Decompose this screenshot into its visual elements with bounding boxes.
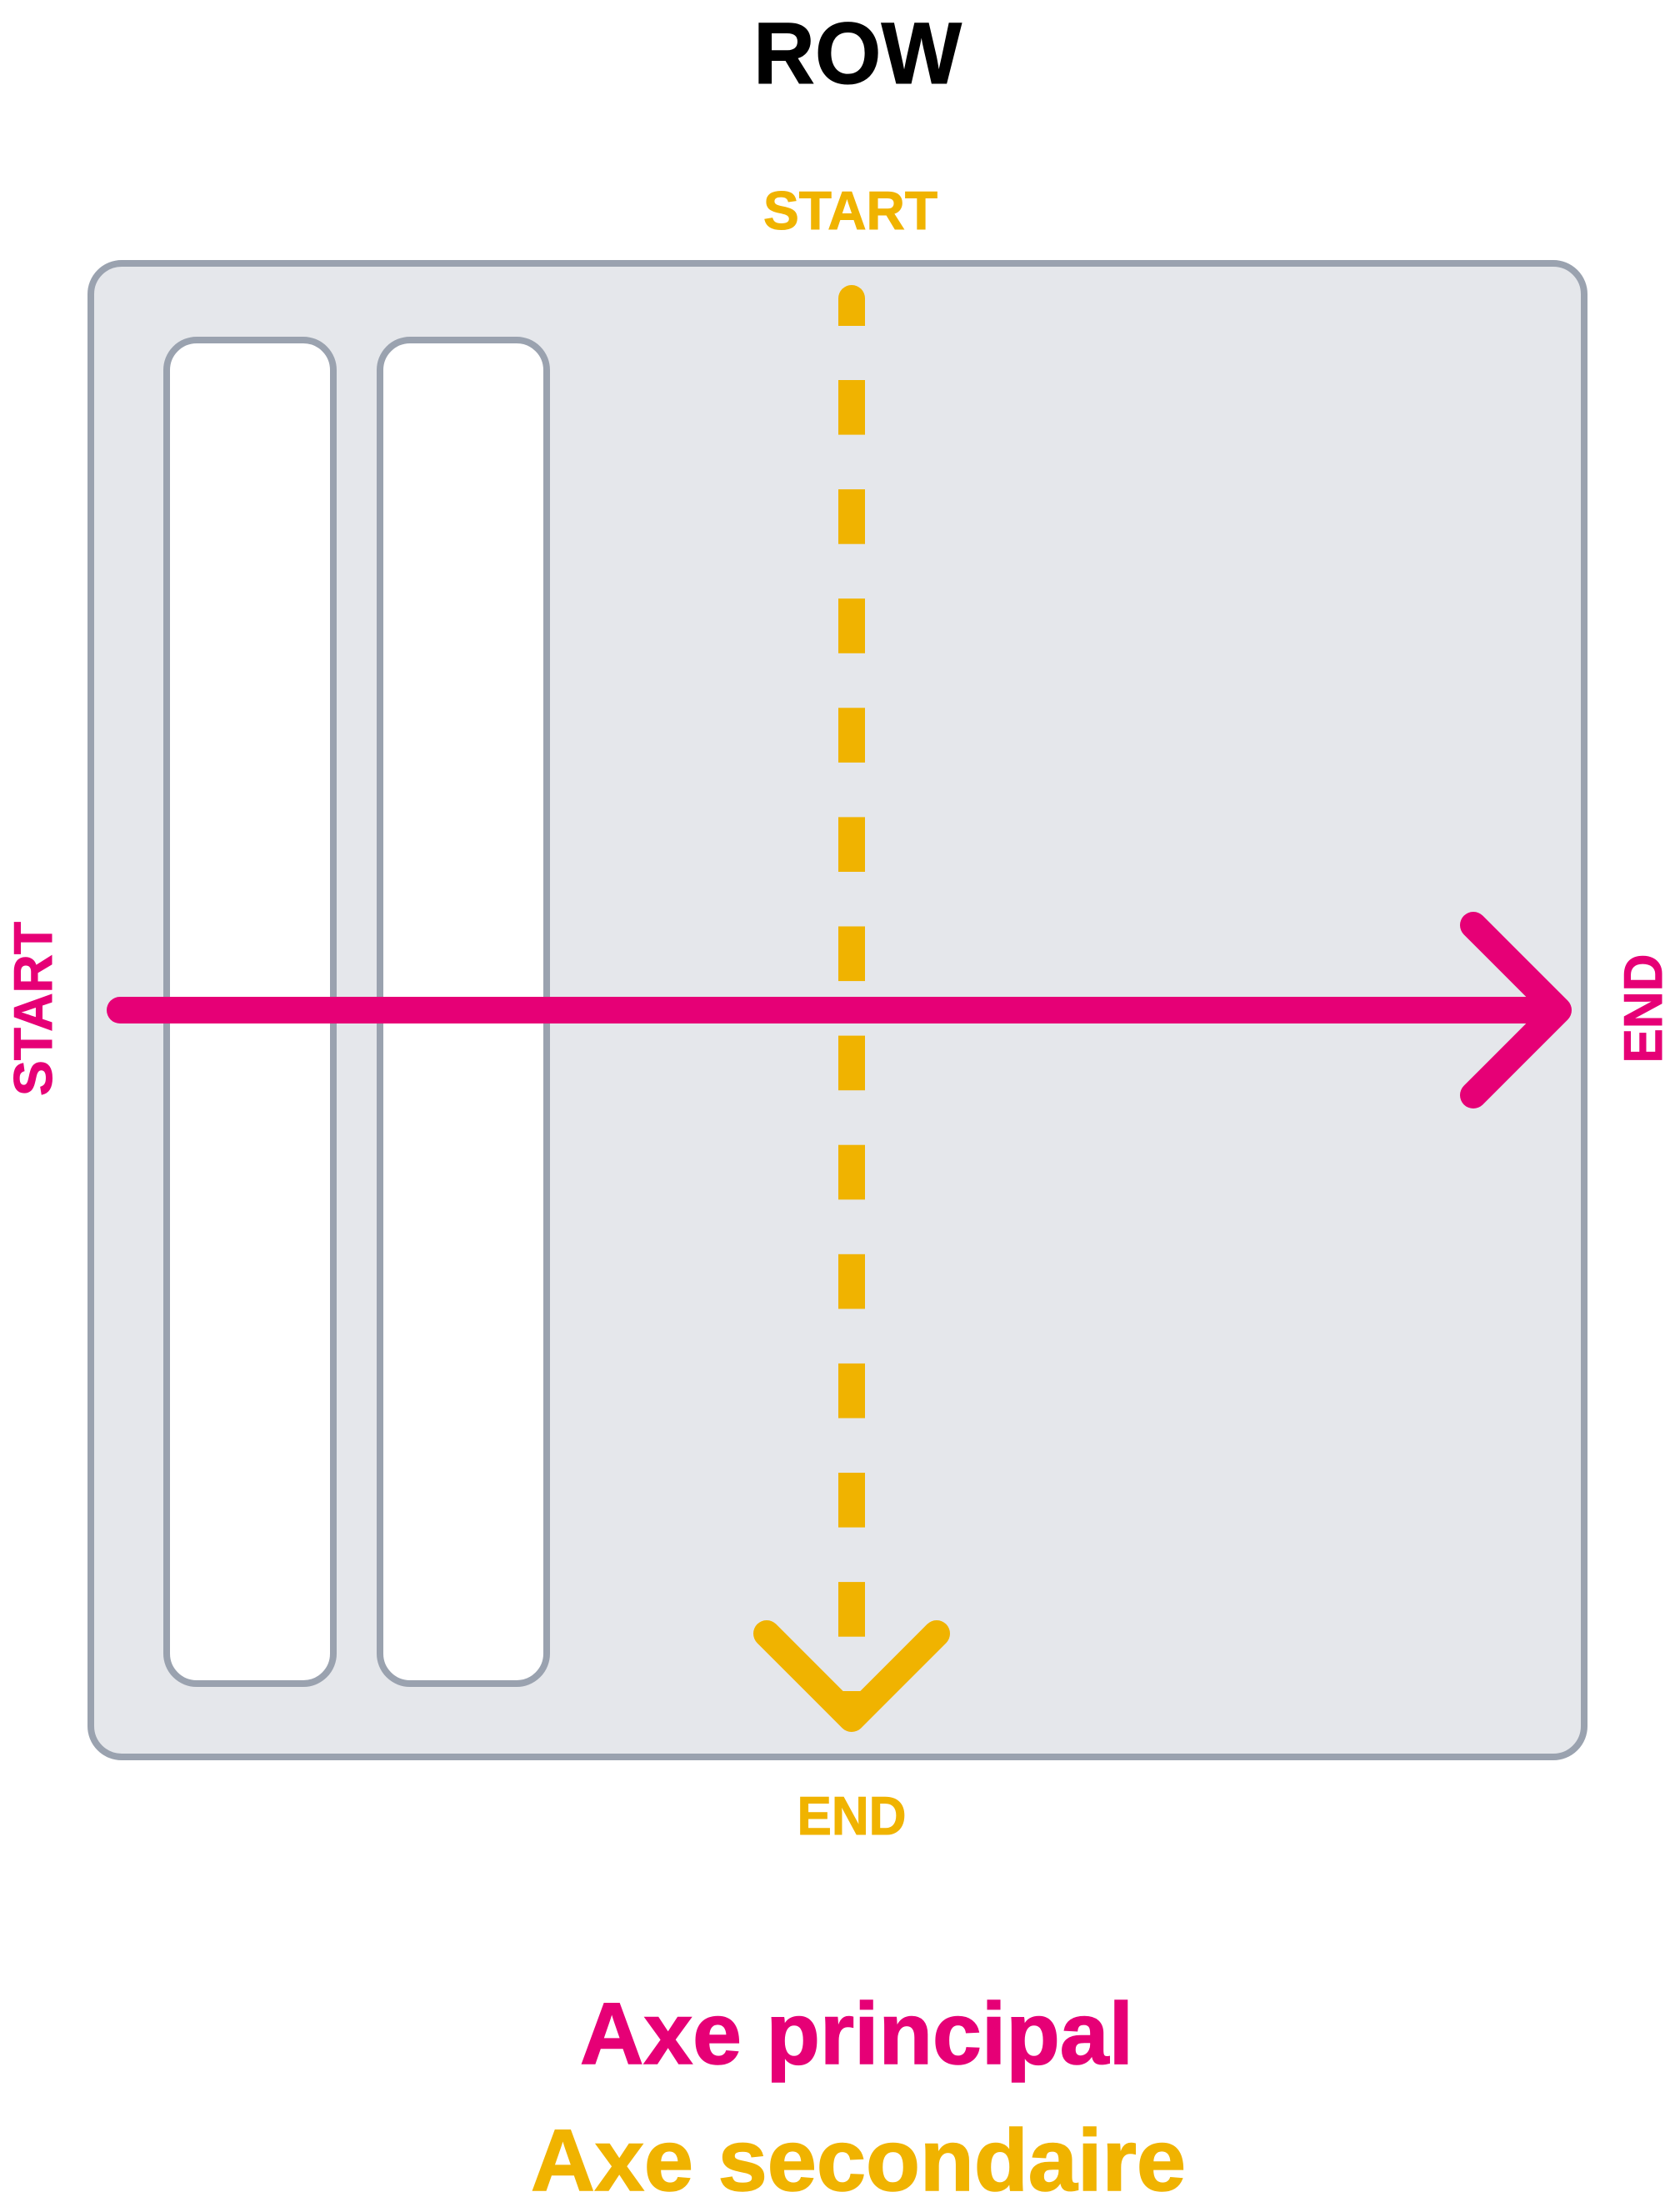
flex item 2 bbox=[380, 340, 547, 1684]
title: ROW bbox=[753, 5, 962, 103]
label: main axis end: END bbox=[1612, 953, 1673, 1063]
flex item 1 bbox=[167, 340, 333, 1684]
arrow: cross axis dashed bbox=[767, 285, 937, 1719]
legend: cross axis: Axe secondaire bbox=[531, 2112, 1186, 2209]
label: cross axis end: END bbox=[797, 1785, 907, 1846]
label: main axis start: START bbox=[2, 922, 63, 1096]
label: cross axis start: START bbox=[763, 180, 938, 241]
legend: main axis: Axe principal bbox=[580, 1985, 1133, 2083]
panel: flex container bbox=[91, 263, 1584, 1757]
arrow: main axis bbox=[120, 925, 1558, 1095]
